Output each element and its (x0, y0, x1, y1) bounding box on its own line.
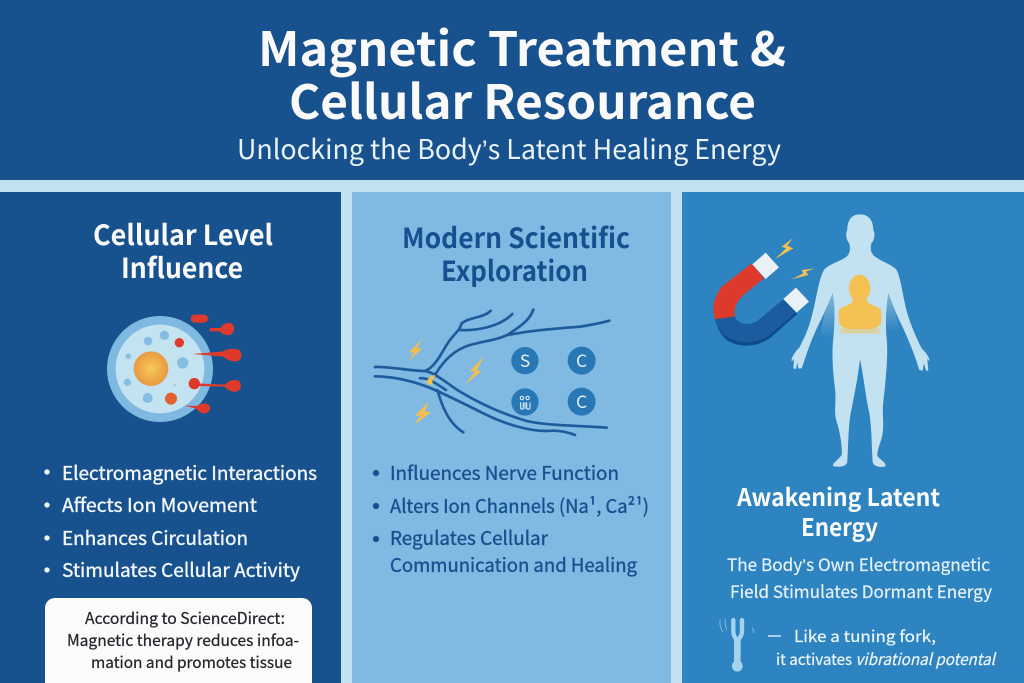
heading: modern scientific exploration (402, 217, 630, 290)
callout: ScienceDirect note: mation and promotes tissue (91, 649, 292, 673)
heading: cellular level influence (93, 214, 273, 287)
illustration: nerve fibres with sparks (375, 310, 609, 435)
heading: awakening latent energy: Awakening Latent (736, 478, 940, 513)
title: Cellular Resourance (289, 64, 756, 133)
bullet list: nerve effects: Influences Nerve Function (390, 459, 619, 486)
icon: horseshoe magnet (713, 238, 815, 346)
ion channel badges: S (520, 347, 530, 372)
panel: cellular level influence (0, 192, 341, 683)
heading: awakening latent energy: Energy (801, 508, 878, 543)
dash (768, 635, 781, 637)
ion channel badges: C (576, 388, 587, 413)
human body silhouette (792, 214, 929, 467)
header banner (0, 0, 1024, 180)
heading: modern scientific exploration: Modern Scientific (402, 217, 630, 257)
text: body's field description: Field Stimulates Dormant Energy (730, 578, 992, 603)
illustration: body and magnet (713, 214, 929, 467)
bullet list: cellular effects: Affects Ion Movement (62, 491, 257, 518)
heading: cellular level influence: Cellular Level (93, 214, 273, 254)
glowing core figure (839, 275, 881, 334)
callout: ScienceDirect note: Magnetic therapy reduces infoa- (67, 627, 299, 651)
bullet list: cellular effects: Electromagnetic Interactions (62, 459, 317, 486)
callout: ScienceDirect note: According to ScienceDirect: (85, 605, 285, 629)
subtitle: Unlocking the Body’s Latent Healing Energy (237, 128, 781, 167)
text: tuning fork analogy: it activates vibrational potental (776, 646, 997, 670)
bullet list: nerve effects: Alters Ion Channels (Na¹, Ca²¹) (390, 492, 649, 519)
title: Magnetic Treatment & (258, 11, 786, 80)
bullet list: nerve effects (373, 459, 649, 578)
ion channel badges: C (576, 347, 587, 372)
heading: awakening latent energy (736, 478, 940, 543)
icon: tuning fork (720, 619, 754, 672)
text: tuning fork analogy (776, 623, 997, 670)
text: body's field description: The Body’s Own Electromagnetic (727, 551, 990, 576)
bullet list: cellular effects (44, 459, 317, 583)
text: tuning fork analogy: Like a tuning fork, (794, 623, 936, 647)
ion channel badges (511, 347, 596, 416)
heading: cellular level influence: Influence (121, 247, 243, 287)
heading: modern scientific exploration: Exploration (441, 250, 588, 290)
title (258, 11, 786, 133)
panel: awakening latent energy (682, 192, 1024, 683)
bullet list: nerve effects: Regulates Cellular (390, 524, 549, 551)
icon: cell with red particles (107, 315, 241, 422)
callout: ScienceDirect note (45, 598, 312, 683)
bullet list: cellular effects: Stimulates Cellular Activity (62, 556, 300, 583)
bullet list: cellular effects: Enhances Circulation (62, 524, 248, 551)
bullet list: nerve effects: Communication and Healing (390, 551, 637, 578)
panel: modern scientific exploration (352, 192, 671, 683)
text: body's field description (727, 551, 992, 603)
